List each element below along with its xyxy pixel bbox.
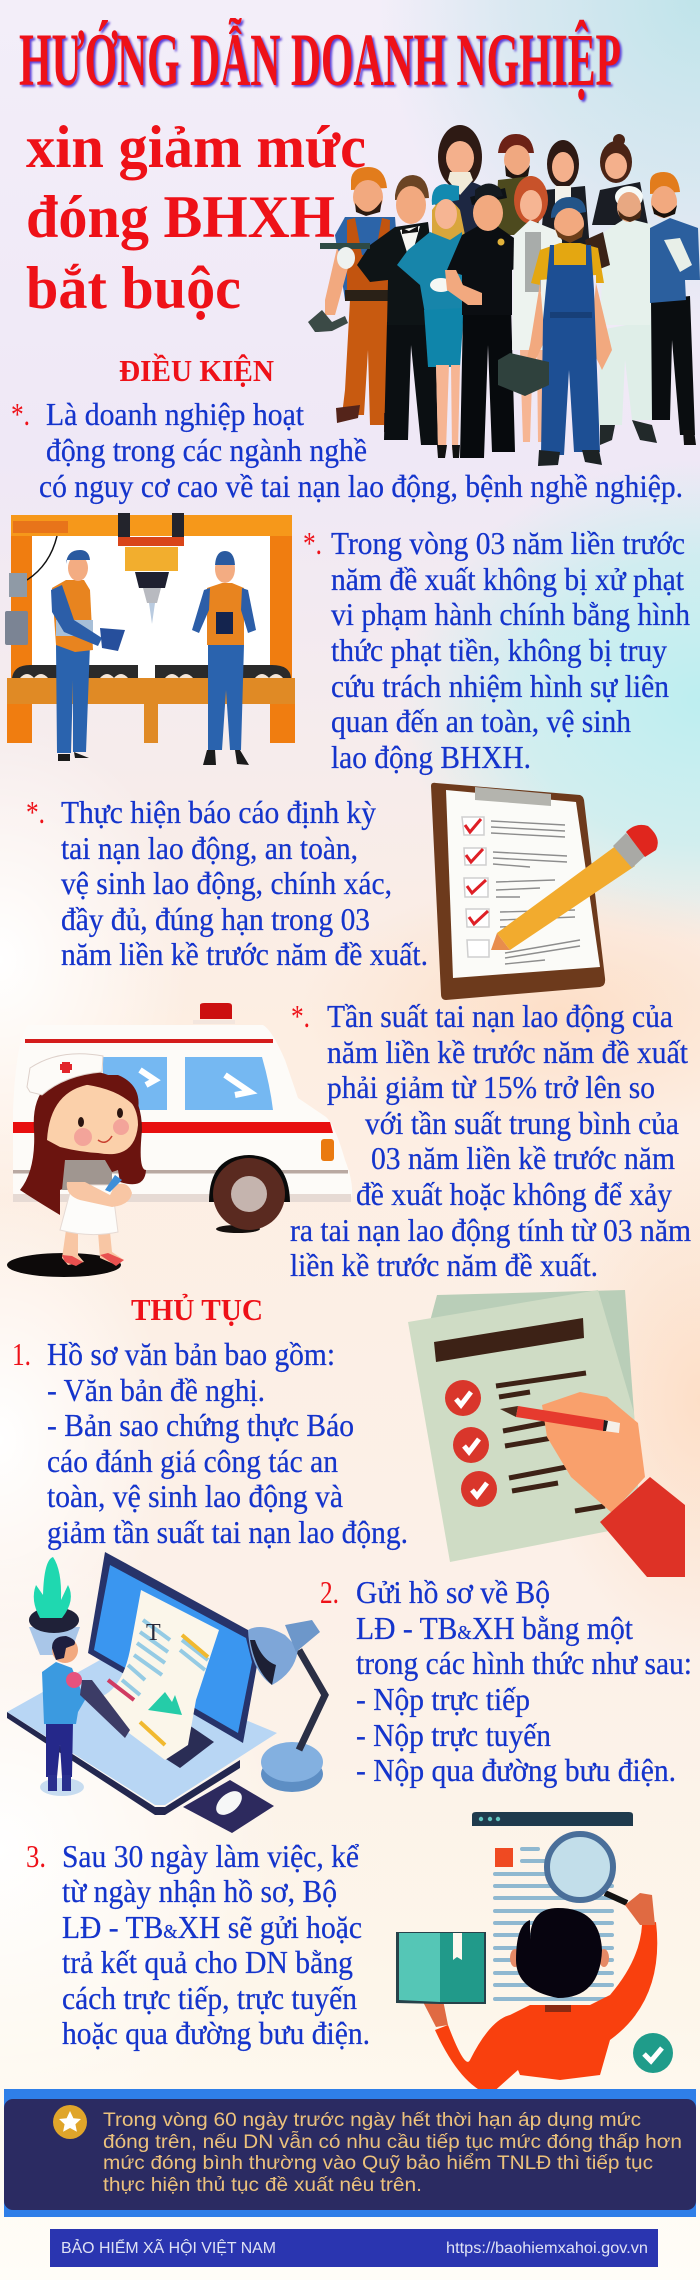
footer bar xyxy=(50,2229,658,2267)
condition 2 text: quan đến an toàn, vệ sinh xyxy=(331,703,631,739)
browser bar xyxy=(472,1812,633,1826)
back row woman with glasses xyxy=(592,134,648,225)
condition 3 text: tai nạn lao động, an toàn, xyxy=(61,830,358,866)
checklist xyxy=(462,817,580,964)
condition 3 text xyxy=(26,794,428,972)
keyboard xyxy=(152,1723,214,1768)
heading: procedures: THỦ TỤC xyxy=(131,1292,263,1327)
footer bar: BẢO HIỂM XÃ HỘI VIỆT NAM xyxy=(61,2237,276,2257)
back row woman short hair xyxy=(540,140,590,250)
note box xyxy=(4,2089,696,2217)
hand xyxy=(542,1392,645,1513)
subtitle: đóng BHXH xyxy=(26,184,335,250)
subtitle: bắt buộc xyxy=(26,255,241,321)
heading: conditions: ĐIỀU KIỆN xyxy=(119,352,274,388)
condition 2 text: lao động BHXH. xyxy=(331,739,531,775)
book xyxy=(396,1932,486,2004)
sleeve xyxy=(600,1477,685,1577)
chef xyxy=(585,186,678,445)
procedure 2 text: 2. xyxy=(320,1574,339,1610)
plant xyxy=(29,1557,80,1655)
person xyxy=(40,1636,130,1796)
condition 3 text: Thực hiện báo cáo định kỳ xyxy=(61,794,376,830)
condition 4 text: đề xuất hoặc không để xảy xyxy=(356,1176,672,1212)
construction worker left xyxy=(308,167,398,435)
worker right xyxy=(650,172,700,445)
wheel xyxy=(209,1155,290,1233)
illustration: person reading document xyxy=(396,1812,673,2095)
windows xyxy=(103,1057,273,1110)
illustration: ambulance xyxy=(7,1003,352,1277)
clip xyxy=(475,787,551,806)
condition 1 text: Là doanh nghiệp hoạt xyxy=(46,396,304,432)
condition 3 text: đầy đủ, đúng hạn trong 03 xyxy=(61,901,370,937)
procedure 1 text: Hồ sơ văn bản bao gồm: xyxy=(47,1336,335,1372)
footer bar: https://baohiemxahoi.gov.vn xyxy=(446,2240,648,2257)
condition 3 text: *. xyxy=(26,794,45,830)
condition 4 text: 03 năm liền kề trước năm xyxy=(371,1140,675,1176)
document lines xyxy=(495,1849,612,1999)
note text: Trong vòng 60 ngày trước ngày hết thời hạn áp dụng mức xyxy=(103,2110,641,2131)
procedure 3 text: hoặc qua đường bưu điện. xyxy=(62,2015,370,2051)
condition 1 text: động trong các ngành nghề xyxy=(46,432,367,468)
procedure 1 text: - Bản sao chứng thực Báo xyxy=(47,1407,354,1443)
procedure 1 text: - Văn bản đề nghị. xyxy=(47,1372,265,1408)
procedure 2 text: - Nộp trực tiếp xyxy=(356,1681,530,1717)
procedure 2 text: Gửi hồ sơ về Bộ xyxy=(356,1574,550,1610)
condition 4 text: liền kề trước năm đề xuất. xyxy=(290,1247,598,1283)
check badge xyxy=(633,2033,673,2073)
condition 2 text: cứu trách nhiệm hình sự liên xyxy=(331,668,669,704)
flight attendant xyxy=(397,184,466,458)
procedure 2 text xyxy=(320,1574,692,1788)
condition 4 text: *. xyxy=(291,998,310,1034)
back row woman with dark hair xyxy=(435,125,495,300)
condition 2 text xyxy=(303,525,690,775)
condition 4 text: với tần suất trung bình của xyxy=(365,1105,679,1141)
worker with tablet xyxy=(192,551,256,765)
pencil xyxy=(500,1406,620,1433)
note text xyxy=(103,2110,682,2196)
back row bearded man xyxy=(495,134,545,235)
condition 4 text: Tần suất tai nạn lao động của xyxy=(327,998,673,1034)
procedure 2 text: - Nộp qua đường bưu điện. xyxy=(356,1752,676,1788)
illustration: checklist document and hand xyxy=(408,1290,685,1577)
worker with clipboard xyxy=(51,550,125,761)
pencil xyxy=(491,825,658,950)
procedure 3 text: LĐ - TB&XH sẽ gửi hoặc xyxy=(62,1909,362,1945)
condition 2 text: *. xyxy=(303,525,322,561)
drill xyxy=(118,513,184,624)
condition 3 text: năm liền kề trước năm đề xuất. xyxy=(61,936,428,972)
plumber in overalls xyxy=(498,197,612,466)
illustration: group of workers xyxy=(308,125,700,466)
procedure 3 text xyxy=(26,1838,370,2051)
mouse pad xyxy=(183,1780,274,1833)
document: T xyxy=(146,1620,161,1646)
procedure 1 text: giảm tần suất tai nạn lao động. xyxy=(47,1514,408,1550)
magnifier xyxy=(547,1834,627,1903)
procedure 1 text: cáo đánh giá công tác an xyxy=(47,1443,338,1479)
note text: mức đóng bình thường vào Quỹ bảo hiểm TNLĐ thì tiếp tục xyxy=(103,2153,653,2174)
laptop base xyxy=(7,1660,277,1805)
toolbox xyxy=(498,353,549,396)
document xyxy=(85,1590,219,1760)
condition 3 text: vệ sinh lao động, chính xác, xyxy=(61,865,392,901)
condition 4 text xyxy=(290,998,691,1283)
icon: star badge xyxy=(53,2105,87,2139)
text lines xyxy=(496,1373,605,1511)
reader head xyxy=(510,1908,609,1998)
illustration: factory workers xyxy=(5,513,295,765)
subtitle: xin giảm mức xyxy=(26,114,366,180)
police officer xyxy=(445,183,525,458)
procedure 3 text: từ ngày nhận hồ sơ, Bộ xyxy=(62,1873,337,1909)
control box xyxy=(5,536,57,645)
procedure 1 text xyxy=(12,1336,408,1550)
illustration: clipboard and pencil xyxy=(431,783,658,1000)
illustration: person editing on laptop xyxy=(7,1552,325,1833)
condition 1 text: *. xyxy=(11,396,30,432)
procedure 2 text: - Nộp trực tuyến xyxy=(356,1717,551,1753)
nurse xyxy=(7,1054,146,1277)
check circles xyxy=(445,1380,497,1507)
subtitle xyxy=(26,114,366,321)
conveyor xyxy=(7,665,295,743)
procedure 3 text: Sau 30 ngày làm việc, kể xyxy=(62,1838,360,1874)
condition 2 text: thức phạt tiền, không bị truy xyxy=(331,632,667,668)
siren xyxy=(193,1003,235,1024)
procedure 3 text: cách trực tiếp, trực tuyến xyxy=(62,1980,357,2016)
condition 4 text: phải giảm từ 15% trở lên so xyxy=(327,1069,655,1105)
note text: đóng trên, nếu DN vẫn có nhu cầu tiếp tục mức đóng thấp hơn xyxy=(103,2131,682,2153)
waiter in tuxedo xyxy=(320,175,438,445)
condition 1 text xyxy=(11,396,683,504)
doctor xyxy=(512,176,562,442)
reader body xyxy=(422,1893,657,2095)
procedure 1 text: toàn, vệ sinh lao động và xyxy=(47,1478,343,1514)
procedure 3 text: 3. xyxy=(26,1838,46,1874)
procedure 3 text: trả kết quả cho DN bằng xyxy=(62,1944,353,1980)
desk lamp xyxy=(248,1620,325,1792)
procedure 1 text: 1. xyxy=(12,1336,31,1372)
monitor xyxy=(88,1552,258,1743)
procedure 2 text: LĐ - TB&XH bằng một xyxy=(356,1610,633,1646)
note text: thực hiện thủ tục đề xuất nêu trên. xyxy=(103,2175,422,2196)
